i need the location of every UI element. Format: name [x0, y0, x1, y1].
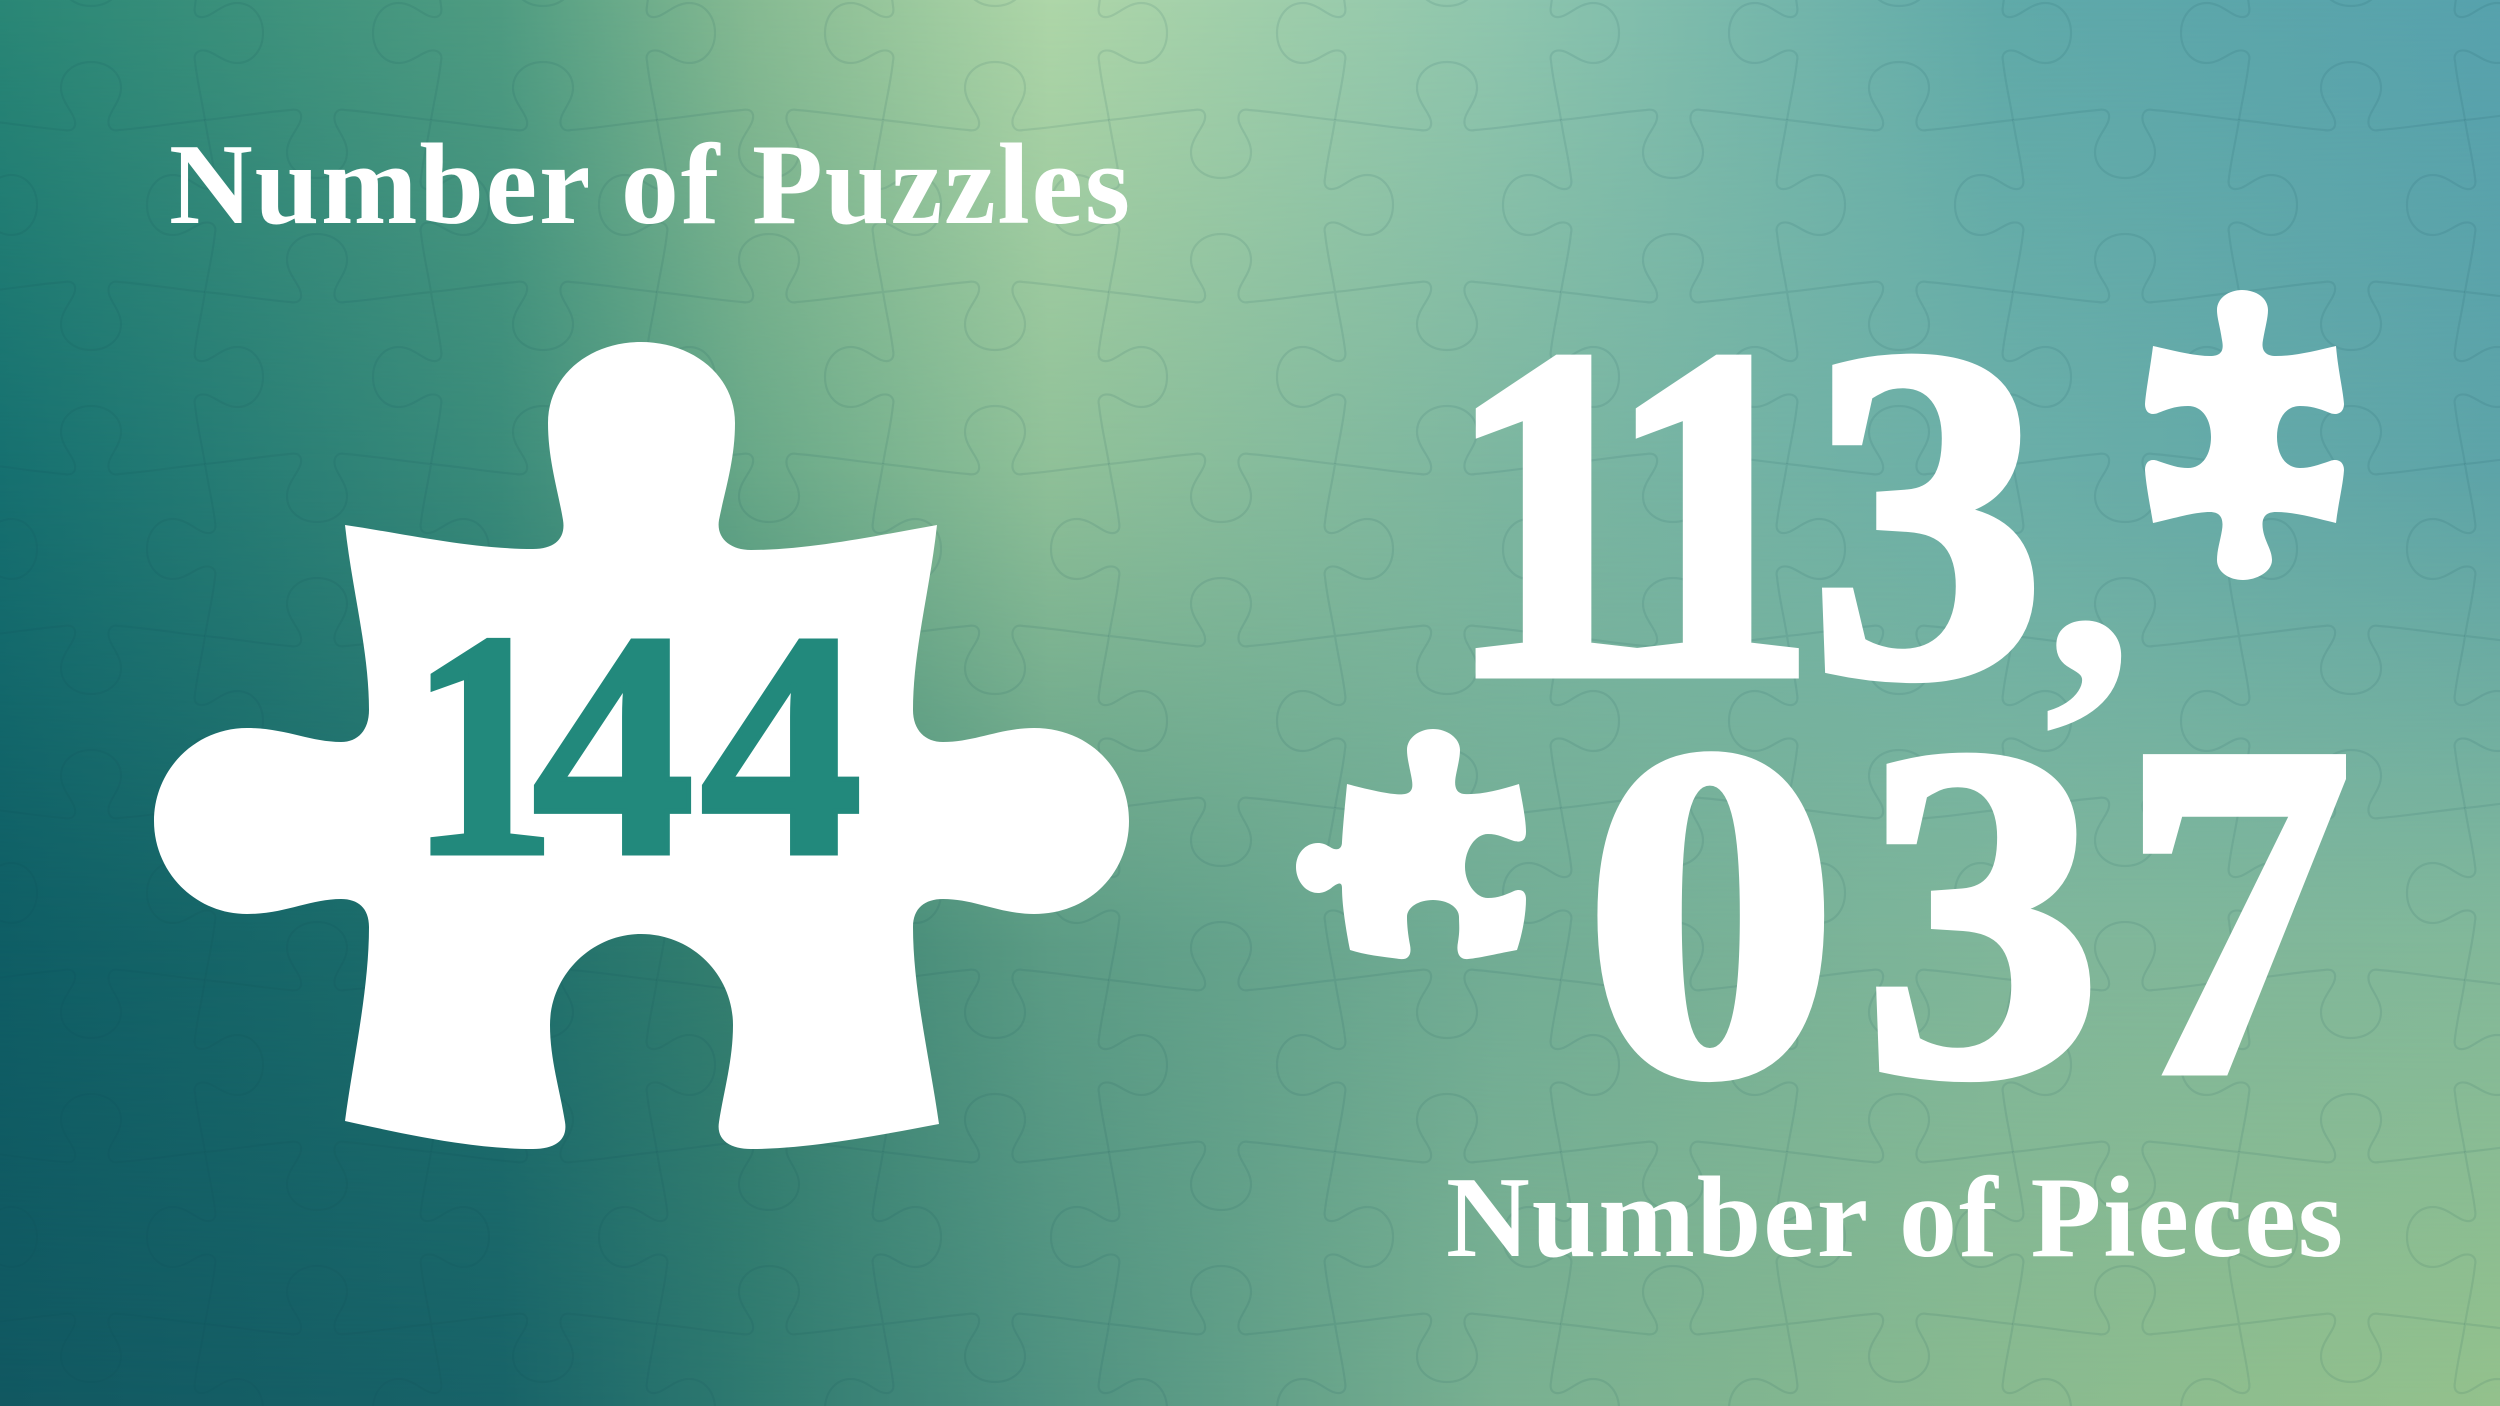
number: 113,037: 1: [1607, 250, 1816, 776]
number: 113,037: ,: [2045, 362, 2132, 750]
panel: puzzle count: [154, 342, 1129, 1149]
heading: Number of Puzzles: Number of Puzzles: [169, 121, 1130, 249]
icon: small puzzle piece top right: [2145, 290, 2344, 580]
number: 113,037: 3: [1810, 252, 2045, 777]
icon: large puzzle piece: [154, 342, 1129, 1149]
number: 144: 1: [409, 566, 557, 923]
number: 113,037: 7: [2122, 649, 2352, 1174]
number: 113,037: [1447, 250, 2352, 1175]
number: 113,037: 3: [1864, 650, 2101, 1175]
icon: small puzzle piece bottom left: [1296, 729, 1526, 959]
number: 113,037: 0: [1584, 651, 1838, 1175]
heading: Number of Pieces: Number of Pieces: [1446, 1154, 2343, 1282]
number: 144: 4: [532, 566, 695, 923]
number: 144: [409, 566, 863, 923]
number: 113,037: 1: [1447, 250, 1656, 776]
number: 144: 4: [700, 566, 863, 923]
